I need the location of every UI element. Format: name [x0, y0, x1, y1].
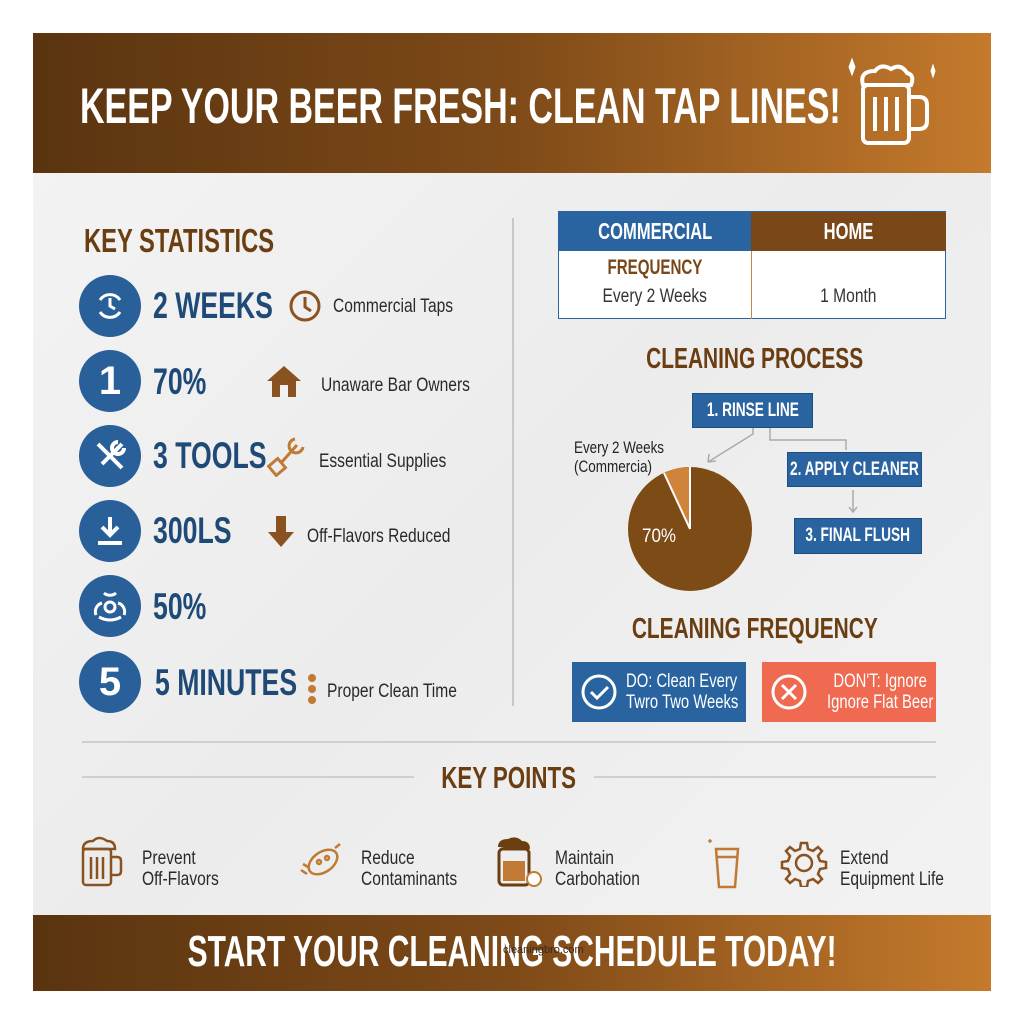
stat row 1: Commercial Taps: [333, 296, 453, 317]
stat row 2: 1: [99, 358, 121, 402]
stat row 6: Proper Clean Time: [327, 681, 457, 702]
point: maintain carbonation: [498, 837, 640, 890]
pie chart: Every 2 Weeks: [574, 438, 664, 457]
stat row 3: Essential Supplies: [319, 451, 446, 472]
vertical divider: [512, 218, 514, 706]
step 2: 2. APPLY CLEANER: [790, 458, 919, 480]
stat row 3: [79, 425, 446, 487]
stat row 1: 2 WEEKS: [153, 285, 273, 326]
stat row 6: [79, 651, 457, 713]
do box: DO: Clean Every: [626, 671, 737, 692]
step 3: [794, 518, 922, 554]
icon: beer mug: [848, 58, 936, 145]
footer banner: [33, 915, 991, 991]
dont box: DON'T: Ignore: [833, 671, 927, 692]
point: extend equipment life: Extend: [840, 848, 889, 869]
point: extend equipment life: [780, 842, 944, 890]
horizontal divider: [82, 741, 936, 743]
point: prevent off-flavors: Prevent: [142, 848, 196, 869]
comparison table: FREQUENCY: [608, 256, 702, 279]
comparison table: HOME: [824, 218, 873, 244]
point: reduce contaminants: Reduce: [361, 848, 415, 869]
comparison table: 1 Month: [820, 286, 877, 307]
pie chart: (Commercia): [574, 457, 652, 476]
stat row 4: [79, 500, 450, 562]
stat row 5: [79, 575, 206, 637]
point: reduce contaminants: [300, 843, 457, 890]
stat row 6: 5 MINUTES: [155, 662, 297, 703]
heading: key points: KEY POINTS: [442, 760, 576, 795]
step 1: [692, 393, 813, 428]
footer text: START YOUR CLEANING SCHEDULE TODAY!: [188, 927, 836, 976]
stat row 2: [79, 350, 470, 412]
comparison table: [558, 211, 946, 319]
dont box: [762, 662, 936, 722]
stat row 3: 3 TOOLS: [153, 435, 267, 476]
comparison table: COMMERCIAL: [598, 218, 712, 244]
watermark: cleaningbro.com: [503, 944, 584, 956]
heading: cleaning process: CLEANING PROCESS: [647, 343, 863, 375]
title: KEEP YOUR BEER FRESH: CLEAN TAP LINES!: [80, 78, 841, 134]
do box: [572, 662, 746, 722]
point: prevent off-flavors: [82, 836, 219, 890]
point: prevent off-flavors: Off-Flavors: [142, 869, 219, 890]
do box: Twro Two Weeks: [626, 692, 738, 713]
comparison table: Every 2 Weeks: [603, 286, 707, 307]
point: reduce contaminants: Contaminants: [361, 869, 457, 890]
dont box: Ignore Flat Beer: [827, 692, 933, 713]
stat row 2: Unaware Bar Owners: [321, 375, 470, 396]
stat row 5: 50%: [153, 586, 206, 627]
point: extend equipment life: Equipment Life: [840, 869, 944, 890]
stat row 2: 70%: [153, 361, 206, 402]
stat row 1: [79, 275, 453, 337]
step 3: 3. FINAL FLUSH: [806, 525, 910, 546]
point: maintain carbonation: Maintain: [555, 848, 614, 869]
heading: key statistics: KEY STATISTICS: [84, 222, 274, 259]
stat row 4: Off-Flavors Reduced: [307, 526, 450, 547]
arrows: [707, 428, 858, 513]
header banner: [33, 33, 991, 173]
point: glass: [708, 839, 740, 888]
point: maintain carbonation: Carbohation: [555, 869, 640, 890]
stat row 6: 5: [99, 660, 121, 704]
step 2: [787, 452, 922, 487]
heading: cleaning frequency: CLEANING FREQUENCY: [632, 613, 878, 645]
pie chart: [574, 438, 752, 591]
key points row: [82, 836, 944, 890]
pie chart: 70%: [642, 526, 676, 547]
step 1: 1. RINSE LINE: [707, 400, 798, 420]
stat row 4: 300LS: [153, 510, 231, 551]
